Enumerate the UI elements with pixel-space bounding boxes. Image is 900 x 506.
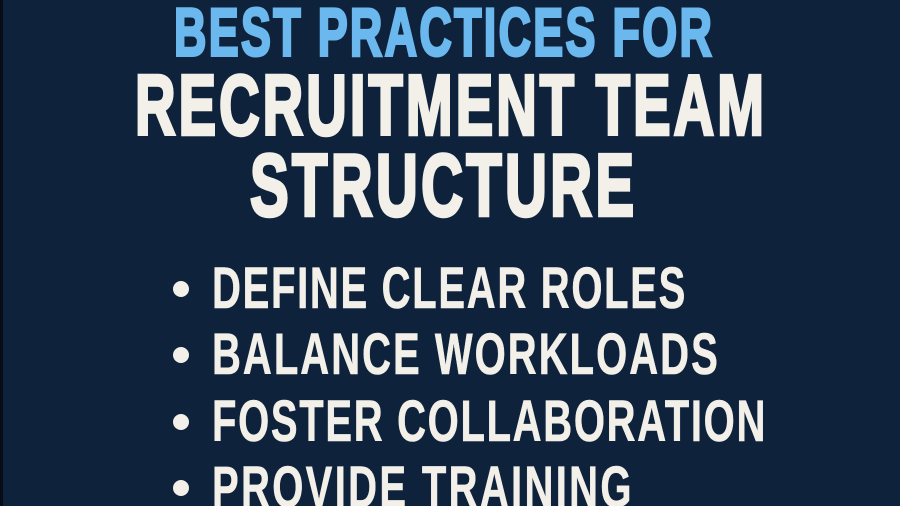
item label: FOSTER COLLABORATION: [212, 389, 765, 454]
list item: balance workloads: [173, 322, 718, 387]
title block: [135, 0, 764, 234]
title line: structure: STRUCTURE: [250, 136, 634, 234]
bullet dot: [173, 281, 189, 297]
list item: provide training: [173, 455, 632, 506]
bullet dot: [173, 347, 189, 363]
item label: DEFINE CLEAR ROLES: [212, 256, 685, 321]
title line: recruitment team: RECRUITMENT TEAM: [135, 59, 764, 153]
item label: BALANCE WORKLOADS: [212, 322, 718, 387]
bullet list: [173, 256, 765, 506]
left edge dark strip: [0, 0, 3, 506]
list item: foster collaboration: [173, 389, 765, 454]
bullet dot: [173, 414, 189, 430]
list item: define clear roles: [173, 256, 685, 321]
bullet dot: [173, 480, 189, 496]
